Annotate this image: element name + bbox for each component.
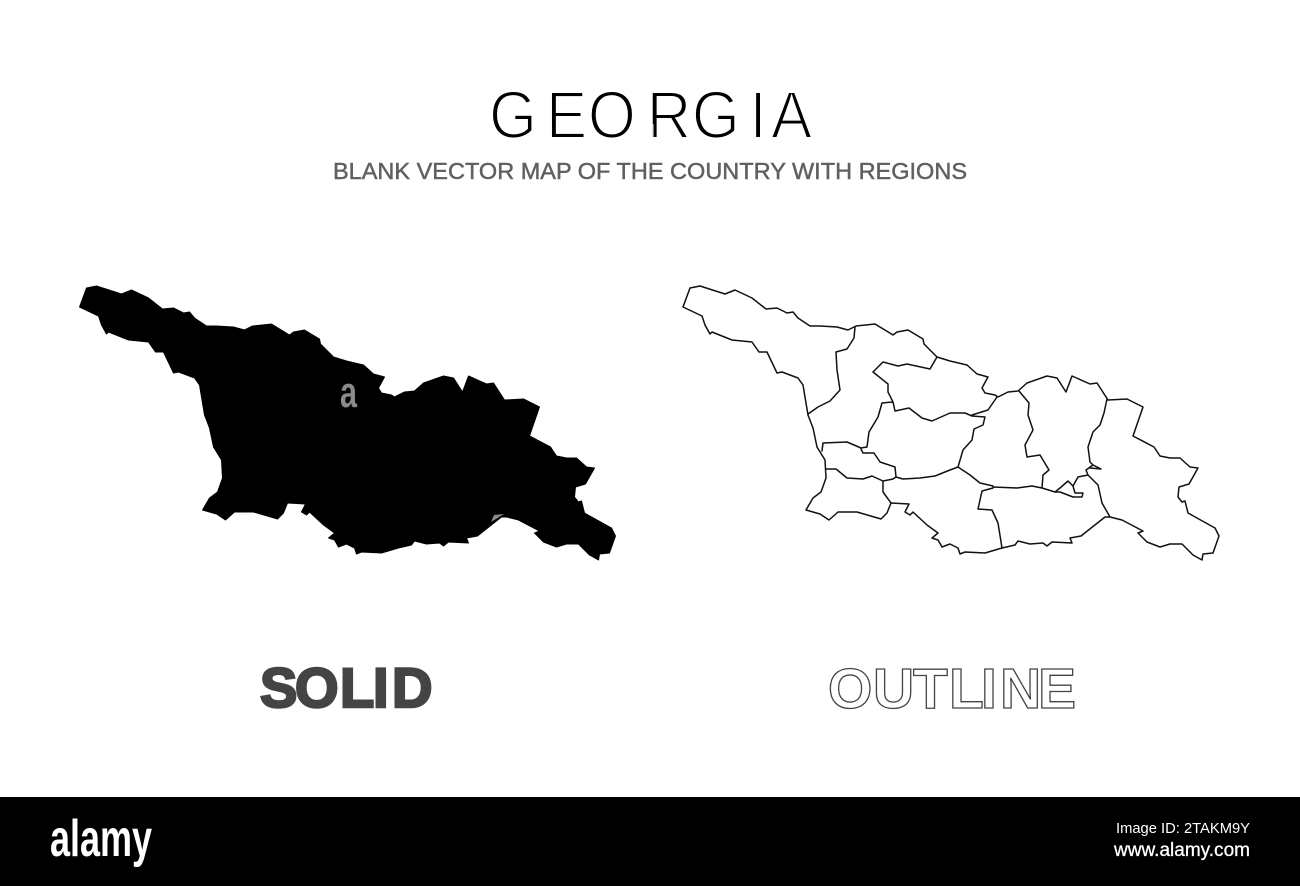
alamy logo: alamy — [50, 810, 152, 868]
outline label: OUTLINE — [828, 657, 1076, 721]
solid map of Georgia — [80, 286, 616, 560]
solid label: SOLID — [260, 656, 432, 719]
watermark fragment on solid map — [491, 514, 504, 522]
outline map of Georgia with regions — [683, 286, 1219, 560]
title: GEORGIA — [489, 78, 812, 153]
subtitle: BLANK VECTOR MAP OF THE COUNTRY WITH REGIONS — [333, 158, 967, 184]
country border — [683, 286, 1219, 560]
region borders — [808, 327, 1110, 548]
website: www.alamy.com — [1113, 840, 1250, 861]
watermark letter on solid map: a — [340, 368, 357, 417]
image id: Image ID: 2TAKM9Y — [1116, 820, 1250, 837]
footer bar — [0, 797, 1300, 886]
